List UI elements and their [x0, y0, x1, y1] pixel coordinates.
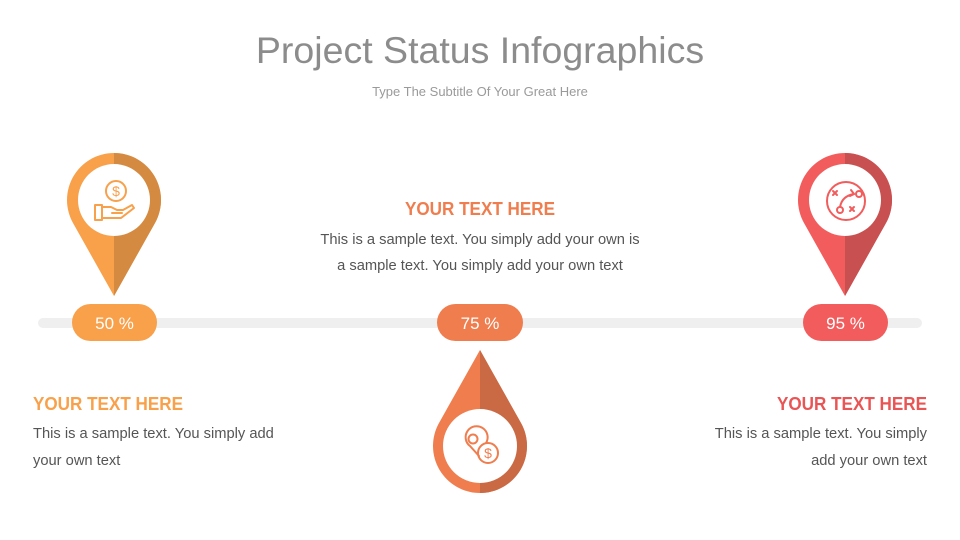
- subtitle: Type The Subtitle Of Your Great Here: [372, 84, 588, 99]
- text block: center: [320, 199, 640, 274]
- pill: 75%: 75 %: [461, 314, 499, 333]
- pill: 95%: 95 %: [826, 314, 865, 333]
- icon: strategy plan: [827, 182, 865, 220]
- icon: location with coin: [466, 426, 498, 463]
- text block: right: YOUR TEXT HERE: [777, 394, 927, 414]
- text block: left: YOUR TEXT HERE: [33, 394, 183, 414]
- text block: center: YOUR TEXT HERE: [405, 199, 555, 219]
- text block: left: This is a sample text. You simply add: [33, 426, 274, 442]
- icon: hand with coin: [95, 181, 134, 220]
- text block: right: This is a sample text. You simply: [715, 426, 928, 442]
- text block: left: your own text: [33, 453, 120, 469]
- pin 2: 75% (inverted): [433, 350, 527, 493]
- text block: center: This is a sample text. You simply add your own is: [320, 232, 640, 248]
- text block: right: [715, 394, 928, 469]
- text block: right: add your own text: [811, 453, 927, 469]
- pill: 50%: [72, 304, 157, 341]
- icon: hand with coin: $: [112, 183, 120, 199]
- icon: location with coin: $: [484, 445, 492, 461]
- pill: 75%: [437, 304, 523, 341]
- pin 1: 50%: [67, 153, 161, 296]
- text block: center: a sample text. You simply add your own text: [337, 258, 623, 274]
- text block: left: [33, 394, 274, 469]
- pill: 95%: [803, 304, 888, 341]
- pin 3: 95%: [798, 153, 892, 296]
- progress track: [38, 318, 922, 328]
- pill: 50%: 50 %: [95, 314, 134, 333]
- title: Project Status Infographics: [256, 29, 704, 71]
